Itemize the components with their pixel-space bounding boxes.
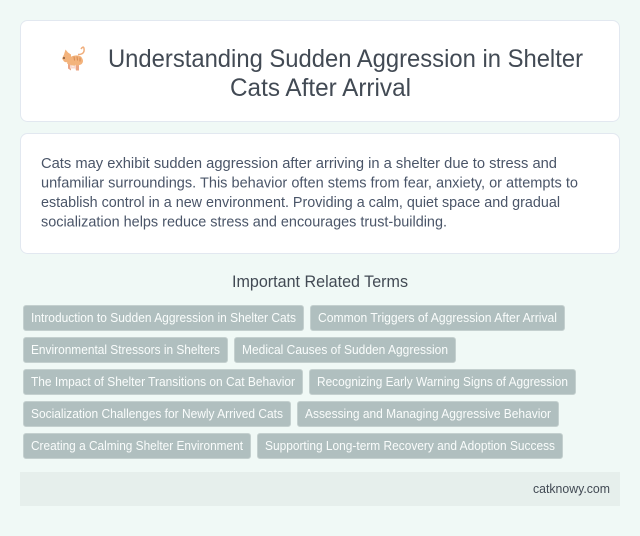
description text: establish control in a new environment. Providing a calm, quiet space and gradual [41,194,560,211]
tag [24,370,302,394]
tag [258,434,562,458]
tag: Supporting Long-term Recovery and Adoption Success [265,438,555,453]
tag: Introduction to Sudden Aggression in Shelter Cats [31,310,296,325]
tag [24,338,228,362]
tag: Environmental Stressors in Shelters [31,342,220,357]
description text: Cats may exhibit sudden aggression after arriving in a shelter due to stress and [41,155,557,172]
tag: The Impact of Shelter Transitions on Cat Behavior [31,374,296,389]
tag [24,306,304,330]
description text: unfamiliar surroundings. This behavior often stems from fear, anxiety, or attempts to [41,174,578,192]
icon: cat [62,47,84,70]
tag [310,306,564,330]
tag: Medical Causes of Sudden Aggression [242,342,448,357]
tag: Recognizing Early Warning Signs of Aggression [317,374,568,389]
tag: Creating a Calming Shelter Environment [31,438,243,453]
footer site name: catknowy.com [533,481,610,496]
panel: related terms tags [24,306,576,458]
tag: Assessing and Managing Aggressive Behavior [305,406,552,421]
tag [24,402,290,426]
description text [41,155,578,230]
tag [24,434,250,458]
tag [310,370,576,394]
tag [298,402,558,426]
heading: important related terms: Important Related Terms [232,273,408,291]
title line 2: Cats After Arrival [230,74,411,102]
title line 1: Understanding Sudden Aggression in Shelter [108,45,583,73]
description text: socialization helps reduce stress and encourages trust-building. [41,214,447,230]
panel: description card [20,134,620,254]
footer band [20,472,620,506]
tag: Common Triggers of Aggression After Arrival [318,310,557,325]
tag [234,338,456,362]
panel: title card [20,20,620,122]
tag: Socialization Challenges for Newly Arrived Cats [31,406,283,421]
